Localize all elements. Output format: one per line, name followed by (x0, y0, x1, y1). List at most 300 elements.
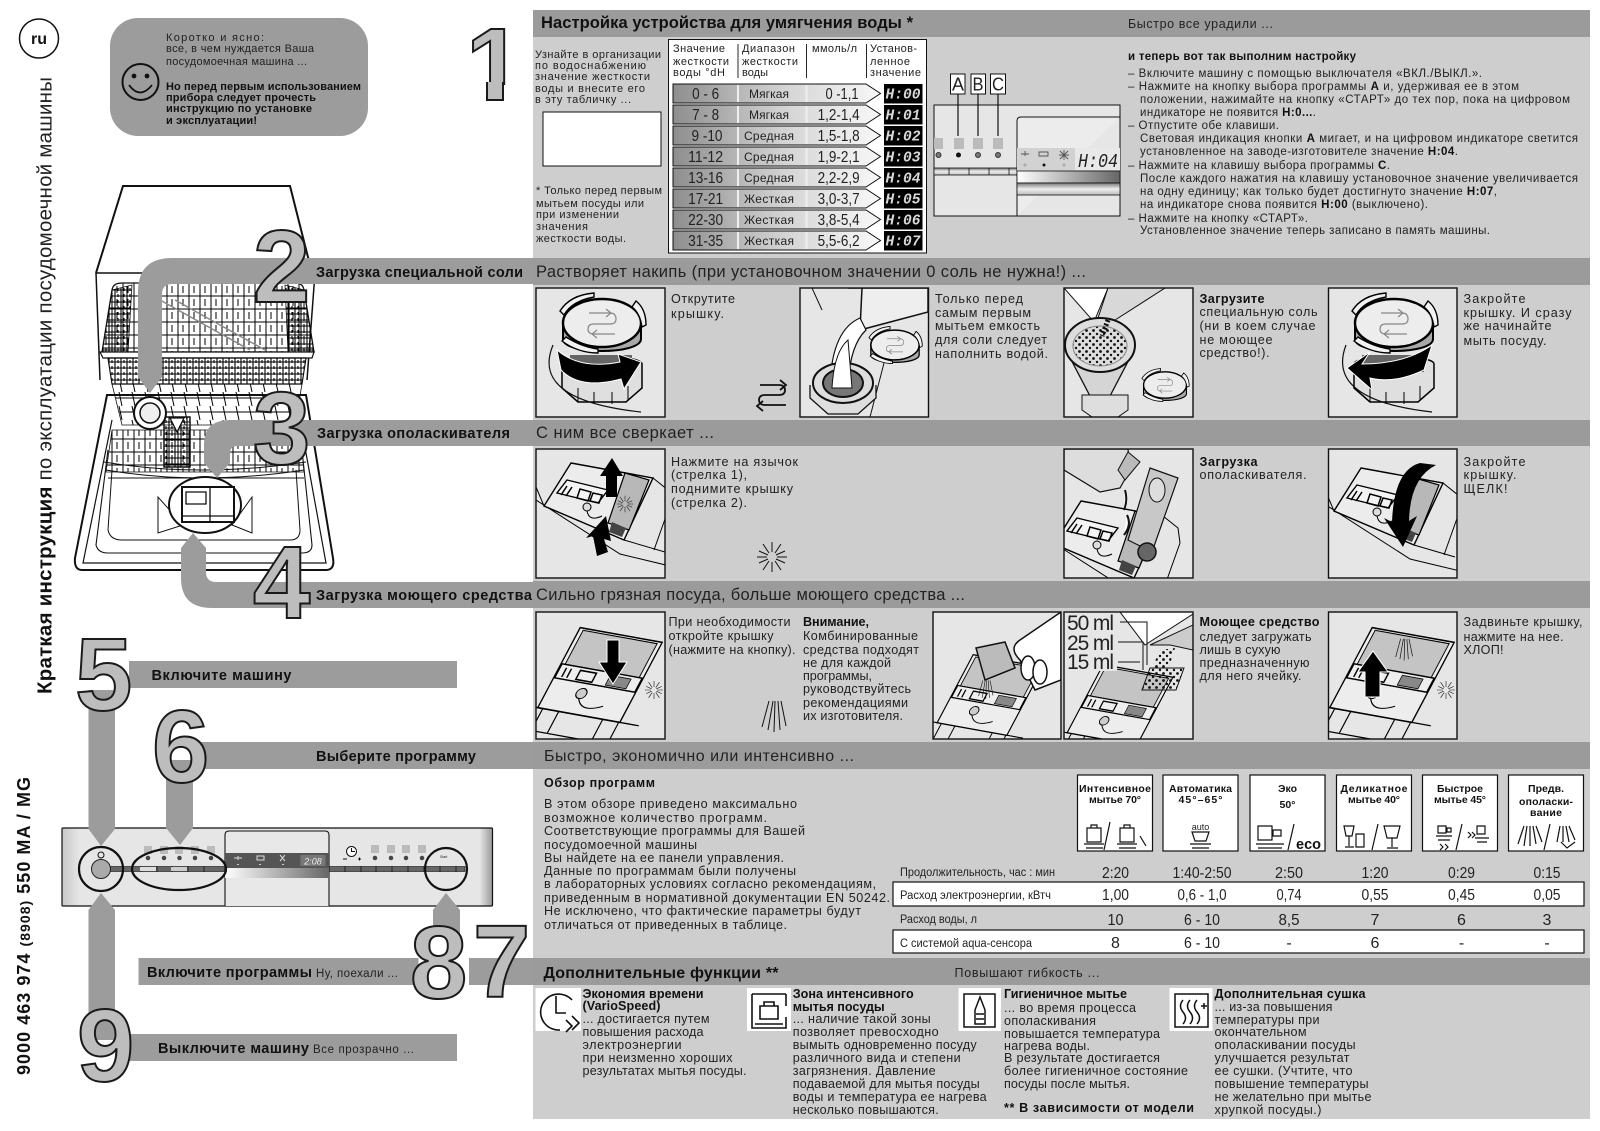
feature text: более гигиеничное состояние (1004, 1064, 1188, 1078)
row: aqua sensor: - (1459, 935, 1464, 952)
big numeral 6: 6 (152, 689, 209, 804)
program card: pre-rinse: Предв. (1528, 783, 1564, 795)
row: duration: 2:20 (1102, 865, 1129, 882)
row H:04: H:04 (886, 170, 920, 188)
big numeral 3: 3 (253, 371, 310, 486)
start circle (425, 848, 467, 890)
icon: heat waves plus (1175, 994, 1208, 1027)
band 6: select program (166, 742, 534, 845)
setup instructions text: на индикаторе снова появится H:00 (выключено). (1140, 199, 1428, 211)
row: energy: 0,55 (1362, 887, 1389, 904)
program card: eco: 50° (1280, 799, 1295, 811)
row: energy: 0,05 (1534, 887, 1561, 904)
row H:06: Жесткая (744, 213, 794, 227)
dosage labels: 15 ml (1067, 651, 1114, 674)
row: duration (900, 865, 1561, 882)
row H:03: 11-12 (688, 149, 723, 166)
step text: close lid: Закройте (1464, 455, 1526, 469)
icon: bottle (964, 994, 995, 1027)
feature text: ополаскивании посуды (1214, 1038, 1356, 1052)
program card: delicate (1336, 775, 1412, 851)
table header: ммоль/л (812, 43, 857, 55)
setup instructions text: индикаторе не появится H:0.... (1140, 107, 1316, 119)
big numeral 8: 8 (410, 905, 467, 1020)
setup instructions text: установленное на заводе-изготовителе значение H:04. (1140, 146, 1458, 158)
step text: unscrew: Открутите (671, 292, 735, 306)
row H:03 (673, 147, 922, 166)
footnote (536, 185, 662, 245)
key labels A B C: C (992, 74, 1004, 94)
row H:02 (673, 126, 922, 146)
program card: intensive: мытье 70° (1089, 794, 1141, 806)
warning text: не для каждой (803, 656, 891, 670)
step text: load salt: средство!). (1200, 346, 1270, 360)
step text: open lid: Нажмите на язычок (671, 455, 798, 469)
row H:02: 1,5-1,8 (818, 128, 860, 145)
control panel illustration (62, 828, 492, 906)
step text: close cap: Закройте (1464, 292, 1526, 306)
photo: insert tablet (932, 611, 1062, 740)
step text: load salt: специальную соль (1200, 305, 1318, 319)
photo: pour rinse aid (1063, 448, 1194, 579)
program overview text: В этом обзоре приведено максимально (544, 797, 797, 811)
left band labels: Все прозрачно ... (313, 1044, 414, 1056)
step text: open detergent lid (668, 615, 796, 657)
feature text: несколько повышаются. (793, 1103, 939, 1117)
water hardness table (668, 40, 926, 253)
photo: open detergent lid (535, 611, 666, 740)
step text: open detergent lid: откройте крышку (668, 629, 774, 643)
feature text: ... достигается путем (582, 1012, 710, 1026)
left band labels (147, 265, 533, 1057)
arrow 2 up (600, 458, 623, 497)
warning text: средства подходят (803, 643, 919, 657)
dispenser circle (158, 477, 252, 533)
water hardness intro text: по водоснабжению (535, 60, 646, 72)
feature text: хрупкой посуды.) (1214, 1103, 1322, 1117)
arrow band 3: rinse aid (204, 420, 534, 478)
band 9: switch off (88, 893, 457, 1061)
footnote: depends on model: ** В зависимости от модели (1004, 1101, 1194, 1115)
footnote: * Только перед первым (536, 185, 662, 197)
warning text: программы, (803, 669, 872, 683)
step text: load rinse aid (1200, 455, 1306, 482)
program card: eco: eco (1296, 836, 1321, 853)
feature text: окончательном (1214, 1025, 1306, 1039)
step text: fill with water (935, 292, 1048, 361)
feature text: не желательно при мытье (1214, 1090, 1372, 1104)
section 1 heading: Быстро все урадили ... (1128, 17, 1273, 31)
water hardness intro text: в эту табличку ... (535, 94, 631, 106)
table header: Диапазон (742, 43, 795, 55)
row H:05 (673, 189, 922, 208)
row: water: 10 (1108, 912, 1124, 929)
row: energy (900, 887, 1561, 904)
step text: load detergent (1200, 615, 1320, 683)
section 1 heading: Настройка устройства для умягчения воды * (541, 14, 914, 32)
left band labels: Ну, поехали ... (316, 968, 398, 980)
program overview text: в лабораторных условиях согласно рекомендациям, (544, 877, 876, 891)
control panel detail with A B C keys (934, 74, 1120, 216)
right button row (343, 845, 426, 860)
row: energy: Расход электроэнергии, кВтч (900, 890, 1051, 902)
row H:07: 31-35 (688, 233, 723, 250)
warning text: их изготовителя. (803, 709, 903, 723)
setup instructions text: и теперь вот так выполним настройку (1128, 51, 1357, 63)
callout text: все, в чем нуждается Ваша (166, 43, 315, 55)
program overview text (544, 776, 890, 932)
on/off knob circle (79, 847, 123, 891)
row: water: 3 (1543, 912, 1552, 929)
feature text: результатах мытья посуды. (582, 1064, 746, 1078)
left band labels: Включите программы (147, 965, 312, 981)
feature text: мытья посуды (793, 1000, 885, 1014)
feature text: позволяет превосходно (793, 1025, 939, 1039)
section 7 band heading: Дополнительные функции ** (544, 965, 779, 982)
table header: воды (742, 67, 768, 79)
program overview text: посудомоечной машины (544, 838, 697, 852)
row: water: 6 (1457, 912, 1466, 929)
setup instructions text (1128, 51, 1578, 237)
step text: fill with water: для соли следует (935, 333, 1047, 347)
icon: quick dishes (1436, 824, 1489, 850)
left band labels: Выключите машину (158, 1041, 309, 1057)
icon: pot in zone (752, 994, 786, 1028)
step text: load rinse aid: Загрузка (1200, 455, 1258, 469)
step text: load detergent: лишь в сухую (1200, 643, 1280, 657)
step text: open lid (671, 455, 798, 510)
feature text: подаваемой для мытья посуды (793, 1077, 980, 1091)
step text: open detergent lid: (нажмите на кнопку). (668, 643, 796, 657)
row H:07: Жесткая (744, 234, 794, 248)
control bar (110, 866, 465, 872)
program card: auto: Автоматика (1169, 783, 1232, 795)
arrow band 4: detergent (181, 533, 534, 608)
row H:07: H:07 (886, 234, 921, 250)
feature text: повышения расхода (582, 1025, 704, 1039)
big numeral 4: 4 (253, 525, 310, 640)
table header: значение (870, 67, 921, 79)
feature: intensive zone (747, 987, 987, 1117)
callout text: Коротко и ясно: (166, 32, 264, 44)
band 7: start program (138, 958, 534, 985)
row H:06 (673, 210, 922, 230)
row: aqua sensor: 6 - 10 (1184, 935, 1220, 952)
icon: rinse aid sparkle (757, 542, 787, 572)
program overview text: приведенным в нормативной документации EN 50242. (544, 891, 890, 905)
step text: load detergent: для него ячейку. (1200, 669, 1302, 683)
feature text: при неизменно хороших (582, 1051, 733, 1065)
row H:04: 13-16 (688, 170, 723, 187)
feature text: ее сушки. (Учтите, что (1214, 1064, 1352, 1078)
callout text: Но перед первым использованием (166, 81, 361, 93)
row H:00: H:00 (886, 86, 920, 104)
upper rack (100, 283, 314, 425)
feature text: Зона интенсивного (793, 987, 914, 1001)
program card: quick (1422, 775, 1498, 851)
row: aqua sensor: - (1286, 935, 1292, 952)
feature text (793, 987, 987, 1117)
start circle: Start (440, 855, 447, 859)
left band labels: Загрузка специальной соли (316, 265, 523, 281)
water hardness intro text: значение жесткости (535, 71, 650, 83)
dosage labels: 25 ml (1067, 632, 1114, 655)
program card: auto: 45°–65° (1178, 794, 1222, 806)
section 4 band title: Сильно грязная посуда, больше моющего средства ... (536, 586, 965, 604)
water hardness intro text: Узнайте в организации (535, 49, 661, 61)
step text: open lid: поднимите крышку (671, 482, 794, 496)
row: water: Расход воды, л (900, 914, 977, 926)
program card: auto (1163, 775, 1238, 851)
icon: clock with chevrons (541, 994, 579, 1032)
row H:06: H:06 (886, 212, 920, 230)
step text: close detergent lid: Задвиньте крышку, (1464, 615, 1582, 629)
row H:04: Средная (744, 171, 794, 185)
step text: unscrew (671, 292, 735, 321)
left band labels: Загрузка ополаскивателя (317, 426, 510, 442)
arrow 1 up (586, 516, 611, 556)
row H:05: 17-21 (688, 191, 723, 208)
row: water: 7 (1371, 912, 1380, 929)
icon: dish auto (1190, 832, 1211, 848)
language badge: ru: ru (31, 31, 47, 48)
step text: close detergent lid (1464, 615, 1582, 657)
row: duration: 1:40-2:50 (1172, 865, 1232, 882)
setup instructions text: на одну единицу; как только будет достигнуто значение H:07, (1140, 186, 1497, 198)
row: aqua sensor: С системой aqua-сенсора (900, 938, 1033, 950)
row: aqua sensor: - (1544, 935, 1550, 952)
program overview text: Соответствующие программы для Вашей (544, 824, 805, 838)
step text: fill with water: мытьем емкость (935, 319, 1040, 333)
callout text: прибора следует прочесть (166, 92, 316, 104)
feature text: повышается температура (1004, 1027, 1160, 1041)
footnote: при изменении (536, 209, 619, 221)
step text: load detergent: следует загружать (1200, 630, 1312, 644)
salt cap circle (134, 397, 166, 429)
icon: salt symbol (757, 380, 786, 411)
row H:00: 0 - 6 (692, 86, 719, 103)
setup instructions text: – Включите машину с помощью выключателя «ВКЛ./ВЫКЛ.». (1128, 68, 1482, 80)
footnote: жесткости воды. (536, 233, 626, 245)
row H:00 (673, 84, 922, 104)
feature text (1214, 987, 1372, 1117)
feature text: температуры при (1214, 1013, 1320, 1027)
row H:07 (673, 231, 922, 250)
row H:05: H:05 (886, 192, 920, 208)
program data table (893, 865, 1584, 953)
table header: жесткости (742, 56, 798, 68)
program card: pre-rinse (1508, 775, 1584, 851)
photo: unscrew salt cap (536, 288, 665, 417)
section 1 heading (541, 14, 1273, 32)
step text: close cap: крышку. И сразу (1464, 306, 1572, 320)
table header: ленное (870, 56, 910, 68)
step text: unscrew: крышку. (671, 307, 724, 321)
feature: hygiene wash (958, 987, 1194, 1115)
row H:06: 3,8-5,4 (818, 212, 860, 229)
program oval (132, 848, 226, 890)
photo: close salt cap (1328, 288, 1457, 417)
row H:00: 0 -1,1 (826, 86, 859, 103)
feature text (1004, 987, 1188, 1091)
setup instructions text: – Нажмите на кнопку «СТАРТ». (1128, 213, 1308, 225)
feature text: вымыть одновременно посуду (793, 1038, 977, 1052)
step text: fill with water: наполнить водой. (935, 347, 1048, 361)
feature text: ... во время процесса (1004, 1001, 1136, 1015)
warning text: Комбинированные (803, 629, 918, 643)
big numeral 7: 7 (473, 904, 530, 1019)
center display unit (225, 831, 329, 906)
step text: close detergent lid: ХЛОП! (1464, 643, 1504, 657)
feature text: ополаскивания (1004, 1014, 1096, 1028)
key labels A B C: B (972, 74, 984, 94)
program overview text: Не исключено, что фактические параметры будут (544, 904, 861, 918)
white row highlights (893, 882, 1584, 953)
row: water: 8,5 (1278, 912, 1300, 929)
arrow: push up (1358, 651, 1388, 697)
callout text (166, 32, 361, 127)
vertical title: Краткая инструкция по эксплуатации посудомоечной машины (34, 77, 56, 694)
smiley icon (122, 64, 158, 100)
row H:05: Жесткая (744, 192, 794, 206)
big numeral 2: 2 (253, 209, 310, 324)
row: duration: 1:20 (1362, 865, 1389, 882)
icon: rinse sprays (1518, 824, 1575, 850)
step text: open detergent lid: При необходимости (668, 615, 790, 629)
row: water (900, 912, 1552, 929)
row H:01: 1,2-1,4 (818, 107, 860, 124)
step text: load detergent: предназначенную (1200, 656, 1310, 670)
program overview text: отличаться от приведенных в таблице. (544, 918, 787, 932)
program card: delicate: Деликатное (1340, 783, 1408, 795)
icon: wash symbol (762, 701, 786, 732)
blank note box (543, 112, 661, 166)
setup instructions text: – Нажмите на клавишу выбора программы C. (1128, 160, 1390, 172)
feature text: повышение температуры (1214, 1077, 1368, 1091)
icon: wine glasses (1344, 824, 1400, 850)
photo: close rinse aid lid (1326, 449, 1460, 578)
dosage labels (1066, 612, 1147, 674)
warning text (803, 615, 919, 723)
left button row (144, 846, 215, 858)
program overview text: возможное количество программ. (544, 811, 767, 825)
program card: quick: Быстрое (1437, 783, 1483, 795)
setup instructions text: Установленное значение теперь записано в память машины. (1140, 225, 1490, 237)
feature text: различного вида и степени (793, 1051, 961, 1065)
warning text: руководствуйтесь (803, 682, 911, 696)
feature: time saving (536, 987, 746, 1078)
feature text: воды и температура ее нагрева (793, 1090, 987, 1104)
arrow band 2: salt (138, 258, 534, 393)
row H:07: 5,5-6,2 (818, 233, 860, 250)
row H:04: 2,2-2,9 (818, 170, 860, 187)
row: aqua sensor: 6 (1371, 935, 1380, 952)
row: duration: 0:29 (1448, 865, 1475, 882)
step text: close cap: же начинайте (1464, 319, 1552, 333)
warning text: рекомендациями (803, 696, 908, 710)
arrow from 8 up (433, 893, 460, 935)
row H:01: H:01 (886, 108, 920, 124)
step text: load salt: не моющее (1200, 333, 1272, 347)
step text: fill with water: Только перед (935, 292, 1024, 306)
feature text: посуды после мытья. (1004, 1077, 1130, 1091)
feature text: Экономия времени (582, 987, 704, 1001)
footnote: значения (536, 221, 588, 233)
section 3 band title: С ним все сверкает ... (536, 424, 714, 442)
step text: close lid: ЩЕЛК! (1464, 482, 1508, 496)
feature text: В результате достигается (1004, 1051, 1160, 1065)
program card: eco: Эко (1278, 783, 1297, 795)
step text: fill with water: самым первым (935, 306, 1031, 320)
section 2 band title: Растворяет накипь (при установочном значении 0 соль не нужна!) ... (536, 263, 1086, 281)
table header: воды °dH (673, 67, 725, 79)
step text: load salt: (ни в коем случае (1200, 319, 1316, 333)
section 6 band title: Быстро, экономично или интенсивно ... (544, 748, 854, 765)
big numeral 9: 9 (77, 988, 134, 1103)
program card: eco (1250, 775, 1325, 853)
step text: load rinse aid: ополаскивателя. (1200, 468, 1306, 482)
program card: intensive: Интенсивное (1079, 783, 1151, 795)
row H:01: 7 - 8 (692, 107, 719, 124)
callout text: инструкцию по установке (166, 103, 312, 115)
arrow: curved down (1384, 463, 1436, 547)
callout bubble: short and clear (110, 18, 368, 136)
row: duration: 0:15 (1534, 865, 1561, 882)
step text: close cap: мыть посуду. (1464, 334, 1546, 348)
photo: close detergent lid (1328, 611, 1458, 740)
row H:04 (673, 168, 922, 188)
row: energy: 0,74 (1276, 887, 1302, 904)
water hardness intro text (535, 49, 661, 106)
program card: delicate: мытье 40° (1348, 794, 1400, 806)
dishwasher illustration (75, 186, 333, 570)
row H:03: H:03 (886, 150, 920, 166)
step text: open lid: (стрелка 2). (671, 496, 747, 510)
door with display: H:04 (1078, 151, 1118, 173)
door with display (1017, 117, 1120, 216)
setup instructions text: Световая индикация кнопки A мигает, и на цифровом индикаторе светится (1140, 133, 1578, 145)
row: aqua sensor (900, 935, 1550, 952)
step text: close lid (1464, 455, 1526, 496)
setup instructions text: – Нажмите на кнопку выбора программы A и, удерживая ее в этом (1128, 81, 1519, 93)
step text: close cap (1464, 292, 1572, 348)
program card: quick: мытье 45° (1434, 794, 1486, 806)
program card: pre-rinse: ополаски- (1519, 796, 1574, 808)
row H:06: 22-30 (688, 212, 723, 229)
row H:02: Средная (744, 129, 794, 143)
row: water: 6 - 10 (1184, 912, 1220, 929)
step text: load salt (1200, 292, 1318, 360)
program card: pre-rinse: вание (1530, 807, 1562, 819)
row: duration: 2:50 (1275, 865, 1303, 882)
row: energy: 0,45 (1448, 887, 1475, 904)
callout text: и эксплуатации! (166, 115, 257, 127)
vertical document number: 9000 463 974 (8908) 550 MA / MG (14, 777, 34, 1075)
table header: Значение (673, 43, 725, 55)
row H:02: 9 -10 (692, 128, 723, 145)
row H:03: 1,9-2,1 (818, 149, 860, 166)
step text: load salt: Загрузите (1200, 292, 1264, 306)
water hardness intro text: воды и внесите его (535, 83, 645, 95)
step text: load detergent: Моющее средство (1200, 615, 1320, 629)
feature text: нагрева воды. (1004, 1039, 1090, 1053)
step text: close detergent lid: нажмите на нее. (1464, 630, 1564, 644)
section 7 band heading (544, 965, 1100, 982)
key labels A B C: A (952, 74, 964, 94)
table header (673, 43, 921, 79)
left band labels: Загрузка моющего средства (316, 588, 533, 604)
feature: extra drying (1170, 987, 1372, 1117)
